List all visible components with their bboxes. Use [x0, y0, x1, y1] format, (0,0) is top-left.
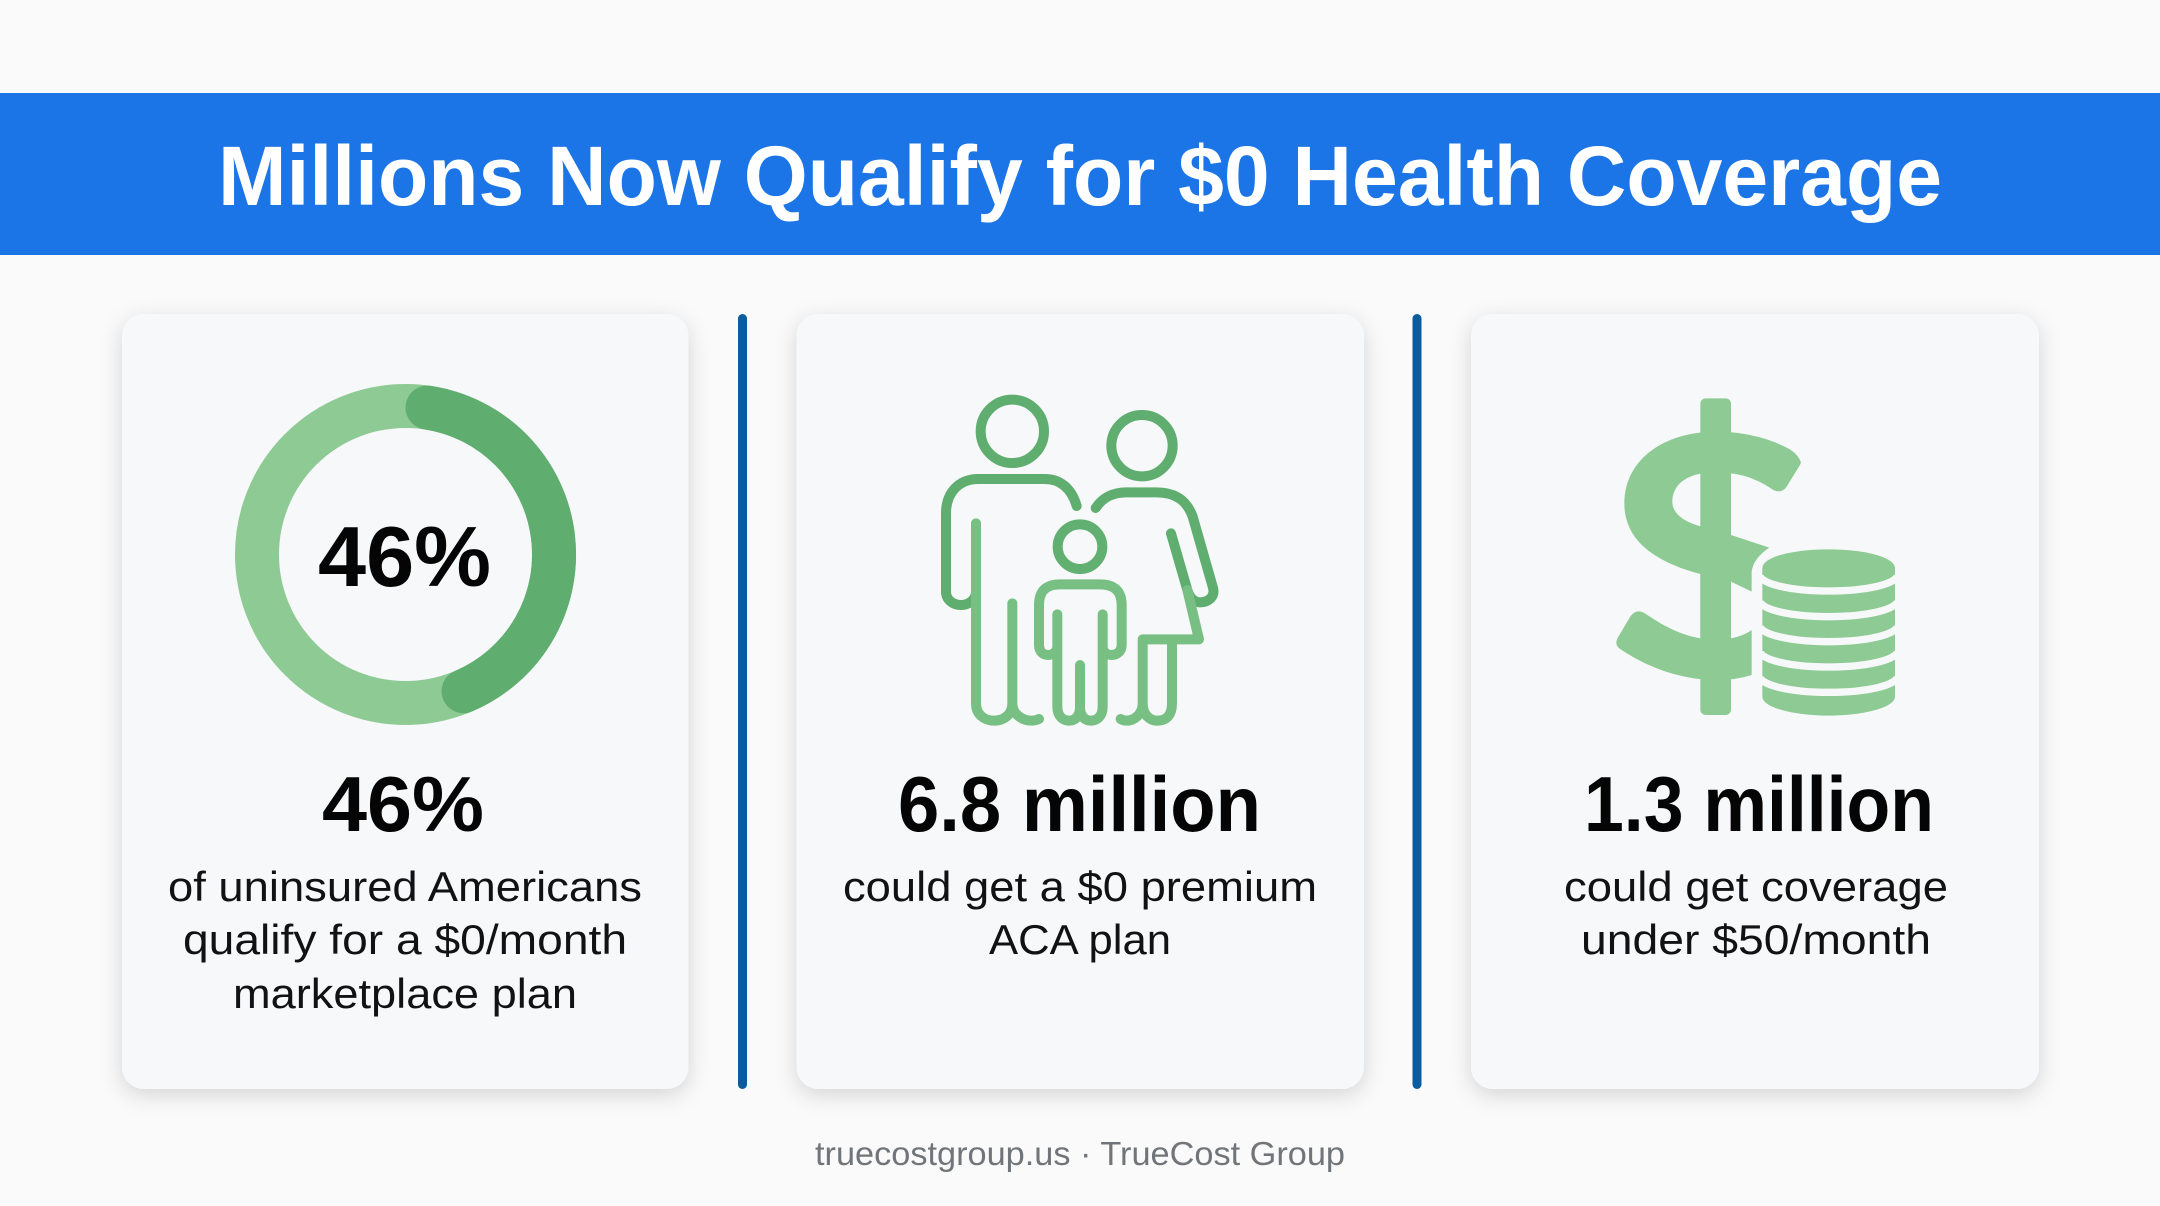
title banner: [0, 93, 2160, 255]
description: under $50/month: [1564, 863, 1948, 963]
icon: dollar and coins: [1616, 398, 1897, 716]
panel: 46% uninsured: [122, 314, 688, 1089]
donut chart: 46%: 46%: [318, 510, 491, 605]
donut chart: 46%: [257, 406, 554, 703]
divider: [1412, 314, 1422, 1089]
stat: 1.3 million: 1.3 million: [1584, 760, 1934, 848]
description: $0 premium: ACA plan: [989, 916, 1171, 963]
description: under $50/month: could get coverage: [1564, 863, 1948, 910]
description: $0 premium: [843, 863, 1317, 963]
description: uninsured Americans: of uninsured Americans: [168, 863, 642, 910]
stat: 46%: 46%: [322, 760, 484, 848]
description: uninsured Americans: qualify for a $0/month: [183, 916, 627, 963]
title: Millions Now Qualify for $0 Health Coverage: [218, 129, 1942, 223]
icon: family: [946, 400, 1213, 721]
description: under $50/month: under $50/month: [1581, 916, 1931, 963]
panel: 6.8 million: [796, 314, 1364, 1089]
footer: truecostgroup.us · TrueCost Group: [815, 1135, 1345, 1172]
panel: 1.3 million: [1471, 314, 2039, 1089]
description: uninsured Americans: [168, 863, 642, 1017]
divider: [738, 314, 747, 1089]
stat: 6.8 million: 6.8 million: [898, 760, 1261, 848]
description: $0 premium: could get a $0 premium: [843, 863, 1317, 910]
description: uninsured Americans: marketplace plan: [233, 970, 577, 1017]
